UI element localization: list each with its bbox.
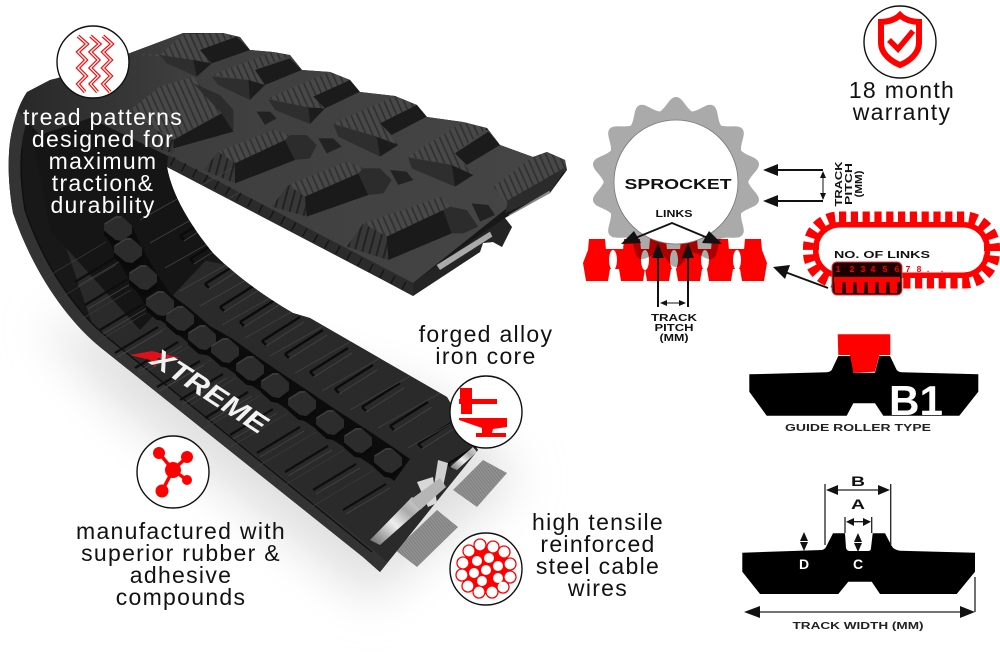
caption: 18 month warranty: 18 month	[849, 77, 955, 103]
centre joint blocks	[257, 112, 277, 125]
outer edge strip	[9, 92, 380, 572]
arrow: loop to link strip	[773, 265, 828, 288]
steel cable wire ends	[395, 460, 507, 567]
label: track width: TRACK WIDTH (MM)	[792, 621, 924, 632]
sprocket gear	[588, 96, 764, 268]
diagram: number of links	[773, 220, 992, 295]
caption: 18 month warranty: warranty	[852, 99, 951, 125]
track loop	[811, 220, 992, 280]
feature: tread patterns	[23, 26, 183, 218]
link numbers: 1	[836, 264, 841, 274]
label: track pitch right: PITCH	[844, 163, 855, 205]
label: links: LINKS	[656, 209, 693, 220]
label: track pitch right	[834, 161, 865, 206]
caption: superior rubber: manufactured with	[76, 518, 286, 544]
link numbers: .	[927, 264, 929, 274]
label: sprocket: SPROCKET	[624, 176, 732, 193]
link numbers: 7	[906, 264, 911, 274]
caption: steel cable wires: reinforced	[540, 531, 656, 557]
caption: tread patterns: maximum	[49, 148, 157, 174]
label: track pitch bottom: PITCH	[654, 323, 694, 334]
top run lugs	[130, 33, 567, 270]
label: track pitch right: TRACK	[834, 161, 845, 206]
caption: forged alloy iron core: iron core	[435, 343, 537, 369]
track profile	[742, 533, 975, 594]
highlighted link teeth	[834, 277, 900, 293]
red guide roller	[838, 334, 890, 373]
xtreme logo	[130, 342, 274, 441]
dimension letters	[799, 473, 865, 572]
feature: forged core	[419, 321, 553, 448]
rubber track product image	[8, 33, 567, 572]
caption: superior rubber: compounds	[116, 584, 246, 610]
dimension letters: B	[851, 473, 865, 489]
icon: molecule	[137, 436, 209, 508]
highlighted links box	[832, 262, 902, 295]
icon: hammer and anvil	[450, 376, 522, 448]
caption: steel cable wires: high tensile	[532, 509, 664, 535]
xtreme logo: XTREME	[144, 342, 274, 441]
lower run connectors	[118, 228, 402, 470]
diagram: track width	[742, 473, 975, 632]
back row lugs	[130, 33, 567, 213]
feature: steel cable	[450, 509, 664, 605]
caption: tread patterns: durability	[50, 192, 156, 218]
label: no. of links: NO. OF LINKS	[834, 249, 930, 261]
label: track pitch bottom: TRACK	[651, 313, 698, 324]
diagram: guide roller type	[749, 334, 978, 434]
soft floor shadow	[40, 320, 520, 600]
link numbers: 3	[861, 264, 866, 274]
link numbers: 8	[917, 264, 922, 274]
icon: shield	[864, 6, 936, 78]
guide profile	[749, 356, 978, 416]
icon: tread zigzag	[57, 26, 129, 98]
guide lugs	[105, 217, 401, 477]
caption: superior rubber: adhesive	[130, 562, 232, 588]
feature: warranty	[849, 6, 955, 125]
lower run stations	[28, 168, 500, 516]
link numbers: 4	[871, 264, 876, 274]
diagram: sprocket and links	[583, 96, 865, 344]
top run plate	[17, 33, 567, 283]
lower run surface	[60, 230, 478, 572]
exposed steel core	[370, 447, 477, 545]
label: guide roller type: GUIDE ROLLER TYPE	[785, 423, 931, 434]
arrows: links	[621, 223, 722, 244]
track body	[8, 33, 567, 572]
inner bend	[60, 167, 213, 330]
feature: rubber compounds	[76, 436, 286, 610]
label: track pitch bottom: (MM)	[660, 333, 688, 344]
caption: steel cable wires: wires	[567, 575, 628, 601]
link numbers: 2	[850, 264, 855, 274]
sprocket hub	[614, 120, 738, 244]
icon: cable cross-section	[450, 533, 522, 605]
caption: tread patterns: traction&	[52, 170, 154, 196]
b1 label: B1	[889, 377, 943, 424]
dimension letters: A	[851, 496, 865, 512]
caption: tread patterns: tread patterns	[23, 104, 183, 130]
caption: forged alloy iron core: forged alloy	[419, 321, 553, 347]
caption: tread patterns: designed for	[32, 126, 174, 152]
caption: superior rubber: superior rubber &	[81, 540, 281, 566]
dimension letters: D	[799, 556, 809, 572]
dimension letters: C	[853, 556, 863, 572]
link numbers: 6	[895, 264, 900, 274]
red track links	[583, 239, 767, 281]
front row lugs	[130, 77, 495, 260]
label: track pitch right: (MM)	[854, 170, 865, 198]
top run side band	[167, 155, 413, 296]
exposed cable strips	[437, 232, 492, 270]
label: track pitch bottom	[651, 313, 698, 344]
arrows: track pitch right	[763, 164, 826, 207]
link numbers: 5	[883, 264, 888, 274]
arrows: track pitch bottom	[652, 243, 694, 307]
caption: steel cable wires: steel cable	[536, 553, 660, 579]
dimension lines	[744, 484, 975, 618]
link numbers: .	[941, 264, 943, 274]
